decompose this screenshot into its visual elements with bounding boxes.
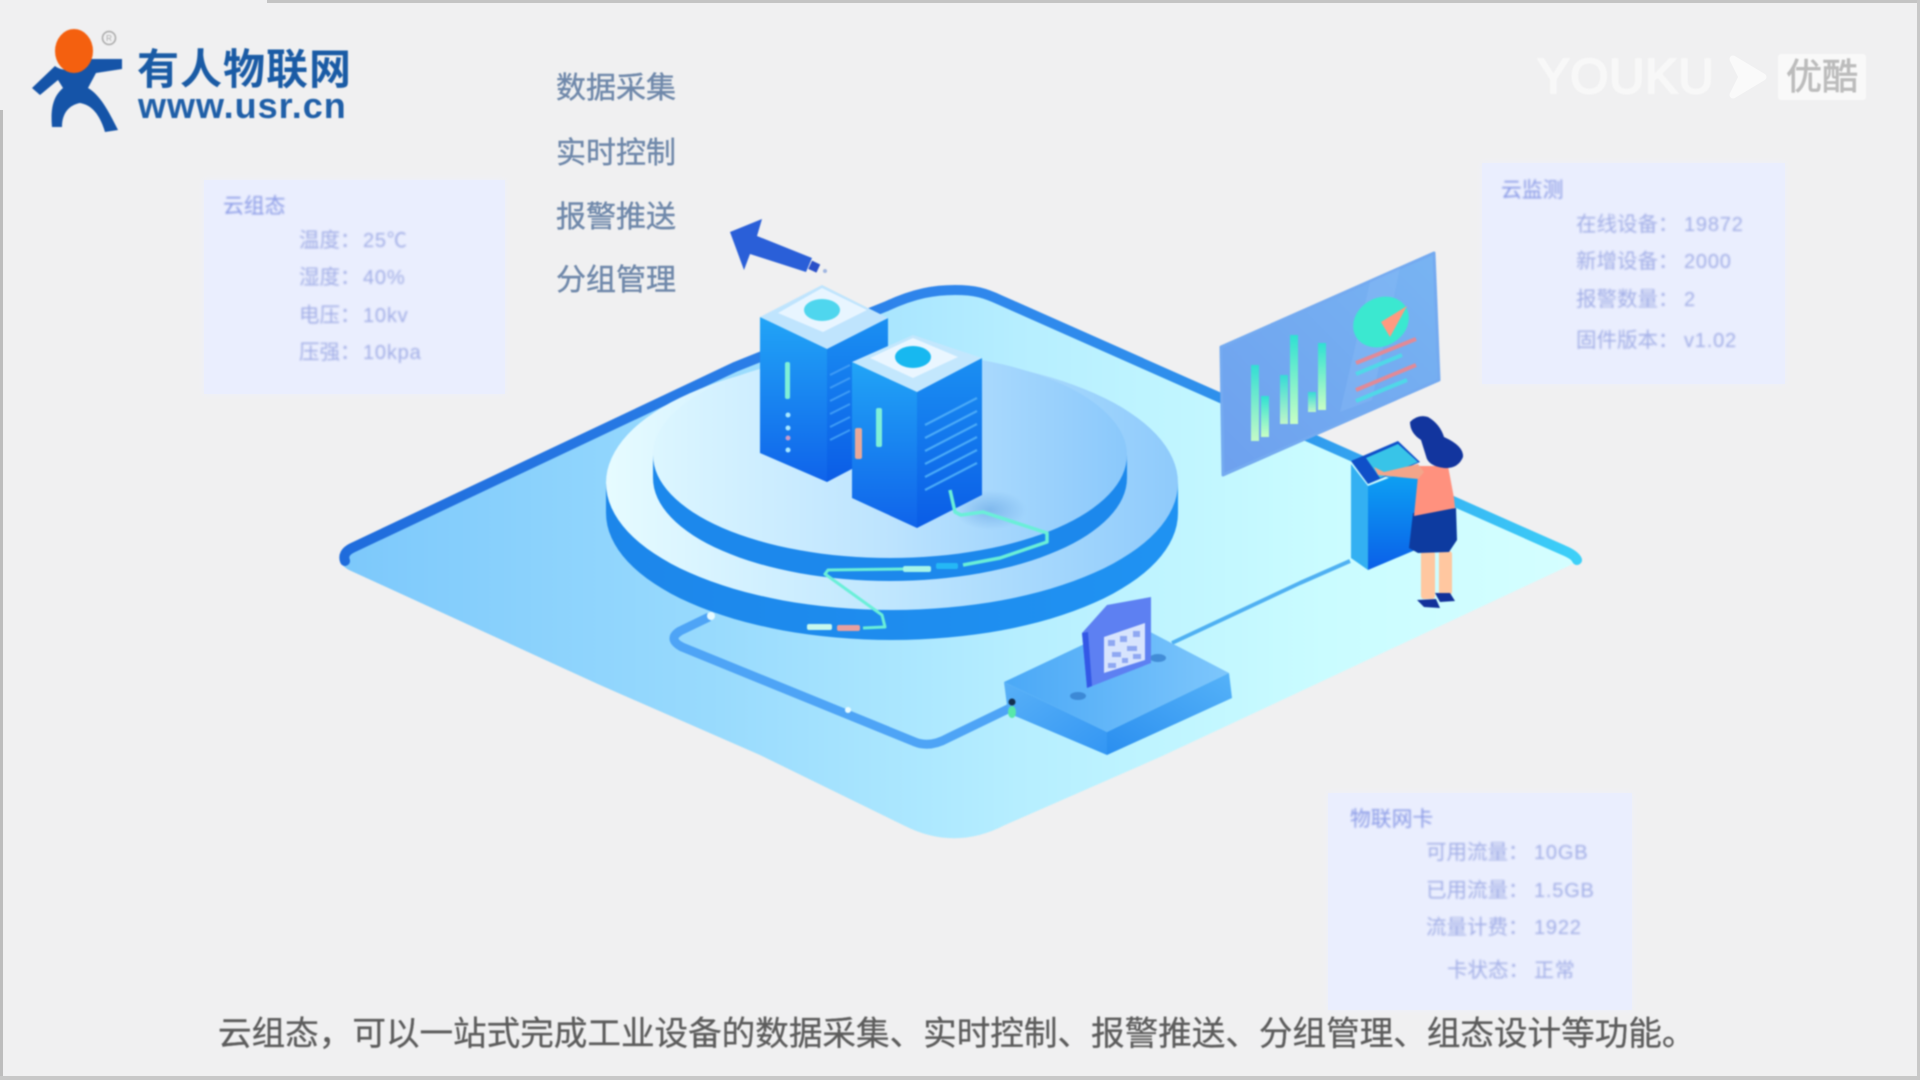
woman operating terminal (1374, 416, 1463, 608)
panel: IoT SIM card: 可用流量： (1426, 841, 1528, 864)
server right (852, 335, 1026, 530)
youku play icon (1730, 56, 1766, 98)
panel: IoT SIM card: 物联网卡 (1350, 808, 1433, 831)
logo figure icon: R (106, 34, 112, 43)
IoT SIM router box (1004, 597, 1232, 755)
brand url: www.usr.cn (138, 85, 347, 126)
SIM card (1082, 597, 1151, 688)
panel: cloud configuration: 40% (363, 267, 405, 289)
logo (31, 28, 352, 133)
feature list (556, 71, 676, 297)
panel: cloud monitoring: 报警数量： (1576, 288, 1678, 311)
feature: realtime control: 实时控制 (556, 137, 676, 170)
panel: cloud configuration: 温度： (299, 229, 360, 252)
panel: IoT SIM card: 1.5GB (1534, 880, 1595, 902)
panel: cloud configuration: 压强： (299, 341, 360, 364)
panel: IoT SIM card: 已用流量： (1426, 879, 1528, 902)
logo figure icon (31, 28, 123, 133)
panel: cloud configuration: 云组态 (223, 195, 285, 218)
panel: cloud monitoring: 新增设备： (1576, 250, 1678, 273)
panel: cloud monitoring: 2 (1684, 289, 1696, 311)
feature: data collection: 数据采集 (556, 72, 676, 105)
platform base (341, 288, 1577, 838)
panel: IoT SIM card: 卡状态： (1447, 959, 1529, 982)
panel: cloud monitoring: 云监测 (1501, 179, 1563, 202)
panel: cloud monitoring: 固件版本： (1576, 329, 1678, 352)
dashboard screen (1221, 253, 1439, 475)
feature: alarm push: 报警推送 (556, 201, 676, 234)
arrow (730, 219, 827, 273)
inner disk (653, 352, 1127, 581)
youku watermark (1537, 50, 1865, 104)
youku wordmark: YOUKU (1537, 50, 1714, 104)
panel: IoT SIM card (1328, 793, 1632, 1010)
panel: cloud configuration (204, 180, 505, 394)
youku chinese badge: 优酷 (1786, 56, 1858, 97)
panel: IoT SIM card: 1922 (1534, 917, 1582, 939)
panel: cloud configuration: 10kv (363, 305, 408, 327)
panel: IoT SIM card: 正常 (1534, 960, 1576, 982)
network cable loop (674, 561, 1350, 744)
panel: IoT SIM card: 流量计费： (1426, 916, 1528, 939)
panel: cloud monitoring: v1.02 (1684, 330, 1737, 352)
panel: cloud configuration: 湿度： (299, 266, 360, 289)
panel: cloud configuration: 25℃ (363, 230, 408, 252)
panel: cloud monitoring (1482, 163, 1785, 384)
pie chart (1344, 287, 1418, 357)
kiosk terminal (1351, 441, 1420, 570)
panel: cloud configuration: 10kpa (363, 342, 422, 364)
subtitle caption: 云组态，可以一站式完成工业设备的数据采集、实时控制、报警推送、分组管理、组态设计等功能。 (218, 1016, 1695, 1053)
panel: cloud monitoring: 在线设备： (1576, 213, 1678, 236)
panel: cloud configuration: 电压： (299, 304, 360, 327)
large disk (606, 356, 1178, 640)
brand name: 有人物联网 (137, 46, 352, 93)
panel: cloud monitoring: 2000 (1684, 251, 1732, 273)
panel: IoT SIM card: 10GB (1534, 842, 1588, 864)
teal signal cables (807, 490, 1047, 631)
server left (760, 285, 888, 482)
panel: cloud monitoring: 19872 (1684, 214, 1744, 236)
feature: group management: 分组管理 (556, 264, 676, 297)
